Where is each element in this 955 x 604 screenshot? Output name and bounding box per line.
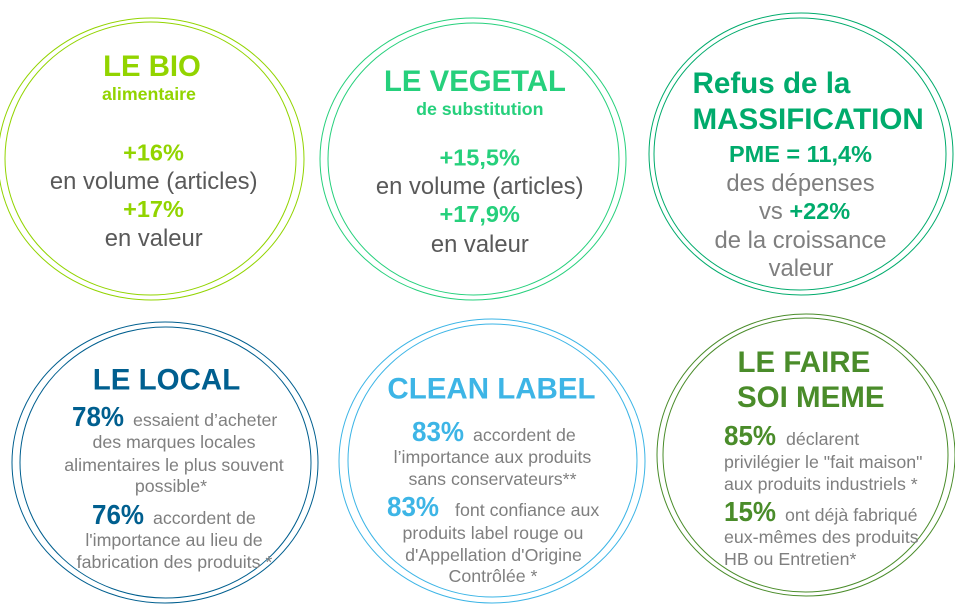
text: alimentaires: alimentaires le plus souvent xyxy=(64,455,284,475)
heading: massification: MASSIFICATION xyxy=(692,103,924,136)
label: en volume: en volume (articles) xyxy=(50,168,258,195)
heading: le vegetal: LE VEGETAL xyxy=(384,65,566,98)
text: accordent de: accordent de xyxy=(153,508,256,528)
heading: soi meme: SOI MEME xyxy=(737,381,885,414)
stat: 78%: 78% xyxy=(72,401,124,432)
stat: vs +22%: vs +22% xyxy=(759,198,850,225)
heading: clean label: CLEAN LABEL xyxy=(387,372,596,406)
text: declarent: déclarent xyxy=(786,429,859,449)
stat: +17% en valeur: +17% xyxy=(123,196,184,222)
panel: le vegetal xyxy=(320,18,626,300)
text: eux-memes: eux-mêmes des produits xyxy=(724,527,919,547)
stat: +17,9%: +17,9% xyxy=(440,201,520,227)
label: des depenses: des dépenses xyxy=(726,170,875,197)
stat: 83%: 83% xyxy=(412,416,464,447)
text: aux produits industriels: aux produits industriels * xyxy=(724,474,918,494)
text: ont deja fabrique: ont déjà fabriqué xyxy=(785,505,918,525)
text: hb ou entretien: HB ou Entretien* xyxy=(724,549,857,569)
panel: clean label xyxy=(339,319,645,603)
text: privilegier: privilégier le "fait maison" xyxy=(724,452,922,472)
text: essaient d'acheter: essaient d’acheter xyxy=(133,410,277,430)
text: controlee: Contrôlée * xyxy=(449,566,538,586)
stat: 76%: 76% xyxy=(92,499,144,530)
text: produits label rouge: produits label rouge ou xyxy=(403,523,583,543)
stat: +16% en volume: +16% xyxy=(123,140,184,166)
text: sans conservateurs: sans conservateurs** xyxy=(408,469,577,489)
text: importance aux produits: l’importance aux produits xyxy=(394,447,591,467)
panel: refus de la massification xyxy=(649,13,953,295)
label: en valeur: en valeur xyxy=(431,231,529,258)
text: des marques locales: des marques locales xyxy=(92,432,256,452)
stat: +15,5%: +15,5% xyxy=(440,144,520,170)
label: valeur: valeur xyxy=(769,255,833,282)
text: appellation: d'Appellation d'Origine xyxy=(405,545,582,565)
heading: refus de la: Refus de la xyxy=(692,67,851,100)
heading: le bio: LE BIO xyxy=(103,50,201,83)
stat: 85%: 85% xyxy=(724,420,776,451)
label: en valeur: en valeur xyxy=(105,225,203,252)
stat: pme: PME = 11,4% xyxy=(729,141,872,167)
heading: le faire: LE FAIRE xyxy=(738,346,870,379)
text: importance au lieu: l'importance au lieu de xyxy=(85,530,263,550)
text: accordent de: accordent de xyxy=(473,425,576,445)
stat: 83%: 83% xyxy=(387,491,439,522)
label: de la croissance: de la croissance xyxy=(715,227,886,254)
panel: le faire soi meme xyxy=(657,314,955,596)
stat: 15%: 15% xyxy=(724,496,776,527)
label: en volume: en volume (articles) xyxy=(376,173,584,200)
panel: le local xyxy=(12,322,318,603)
panel: le bio xyxy=(0,18,304,300)
text: possible: possible* xyxy=(135,476,207,496)
text: font confiance: font confiance aux xyxy=(455,500,599,520)
text: fabrication: fabrication des produits * xyxy=(77,552,272,572)
subheading: de substitution: de substitution xyxy=(416,99,544,119)
heading: le local: LE LOCAL xyxy=(93,364,240,396)
subheading: alimentaire: alimentaire xyxy=(102,84,196,104)
